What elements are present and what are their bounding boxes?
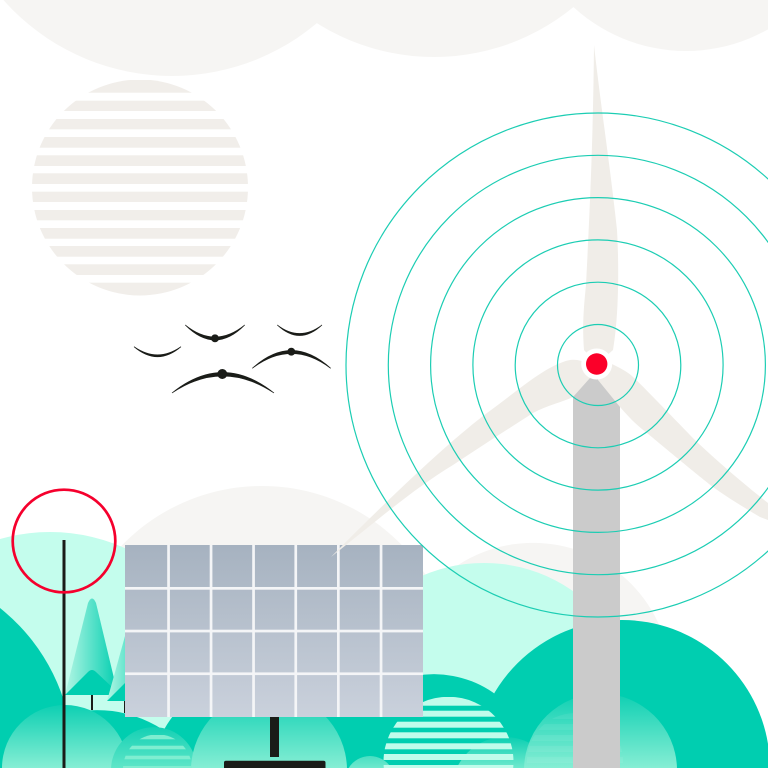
- bird 5: [172, 369, 274, 393]
- left blade: [331, 360, 597, 557]
- top blade: [583, 45, 618, 364]
- bird 1: [134, 347, 181, 357]
- turbine tower: [573, 372, 620, 768]
- tree 2: [107, 610, 150, 713]
- faint striped circle: [527, 714, 623, 763]
- gradient hills: [2, 692, 677, 768]
- turbine blades: [331, 45, 768, 557]
- solar panel: [125, 545, 423, 717]
- bird 2: [185, 325, 245, 342]
- red ring: [13, 490, 115, 592]
- clouds: [0, 0, 768, 76]
- striped sun: [30, 80, 250, 296]
- birds: [134, 325, 331, 393]
- bird 4: [252, 348, 331, 368]
- signal rings: [346, 113, 768, 617]
- teal hills: [0, 566, 768, 768]
- bird 3: [277, 325, 322, 336]
- large striped circle: [380, 697, 516, 768]
- pole: [62, 540, 66, 768]
- turbine hub: [581, 348, 612, 380]
- small striped circle: [123, 735, 191, 768]
- mint hills: [0, 532, 639, 768]
- right blade: [597, 364, 768, 520]
- solar panel stand: [224, 716, 326, 768]
- tree 1: [65, 598, 118, 710]
- background hills: [67, 486, 671, 768]
